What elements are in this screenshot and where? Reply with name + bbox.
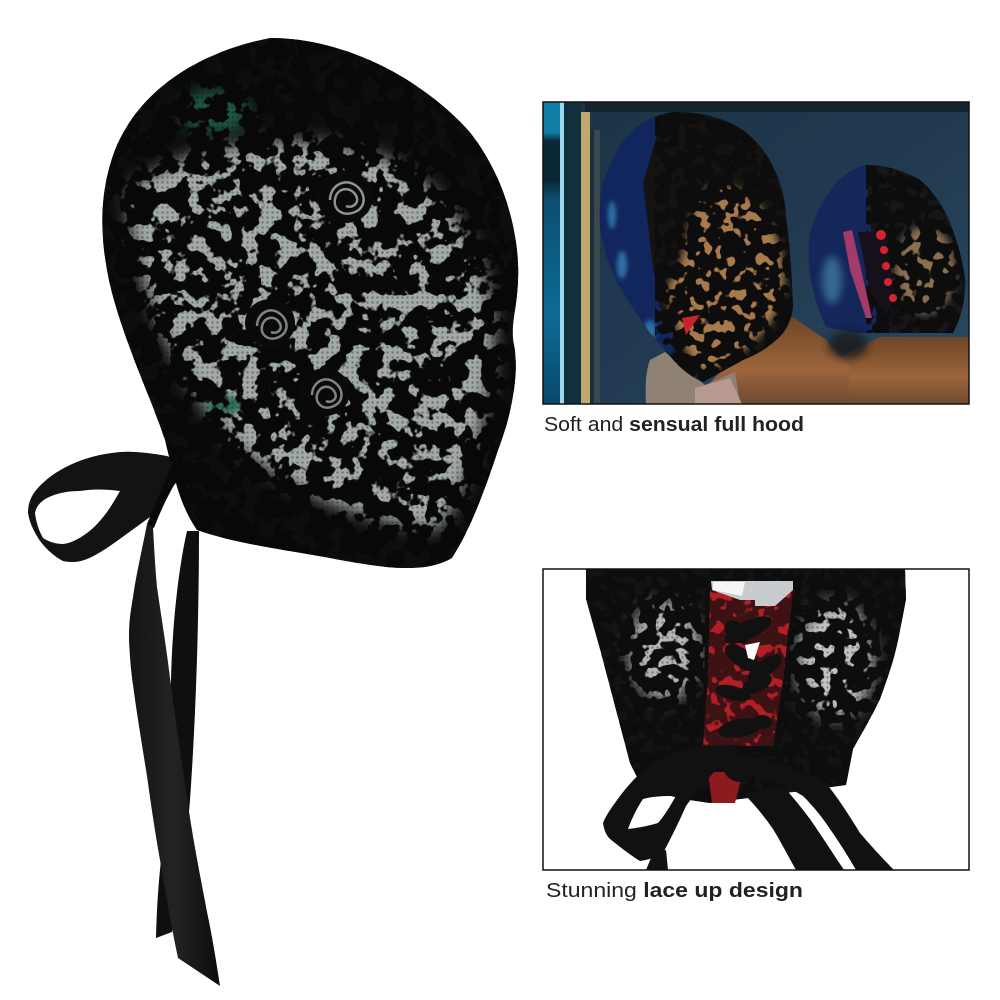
ribbon: back tail bbox=[156, 531, 199, 938]
ribbon: front tail bbox=[129, 524, 220, 986]
red lacing bbox=[843, 230, 872, 318]
red glimpse bbox=[682, 315, 700, 335]
photo panel border bbox=[543, 102, 969, 404]
ribbon ties bbox=[28, 452, 220, 986]
rose one bbox=[317, 171, 373, 223]
rose two bbox=[245, 299, 295, 347]
front hair bbox=[710, 317, 850, 404]
corset opening highlight bbox=[713, 582, 745, 596]
wall top shadow bbox=[585, 102, 969, 112]
hood: lace roses bbox=[245, 171, 373, 416]
mirror frame bbox=[543, 102, 600, 404]
reflected dark neck bbox=[828, 331, 868, 359]
ribbon: loop bbox=[28, 452, 177, 562]
reflected hood bbox=[808, 165, 966, 333]
bow: knot bbox=[724, 772, 743, 782]
caption: full hood: Soft and sensual full hood bbox=[544, 414, 804, 436]
main lace hood bbox=[90, 30, 530, 580]
photo panel: full hood bbox=[543, 102, 970, 404]
red corset panel bbox=[703, 590, 793, 746]
lacing bbox=[716, 616, 782, 738]
lace up panel border bbox=[543, 569, 969, 870]
panel background bbox=[543, 569, 969, 870]
left hair and neck bbox=[646, 352, 740, 404]
hood: net mesh bbox=[90, 30, 530, 580]
caption: lace up: Stunning lace up design bbox=[546, 880, 803, 902]
front hood bbox=[595, 105, 800, 385]
photo wall bbox=[543, 102, 969, 404]
bow: left tail bbox=[646, 850, 668, 870]
hood: sheer lit centre bbox=[128, 141, 494, 530]
hood: green tint near crown bbox=[179, 90, 251, 134]
lacing gap bbox=[745, 642, 760, 660]
rose three bbox=[300, 368, 350, 416]
corset opening bbox=[711, 581, 793, 606]
reflected hair bbox=[835, 337, 969, 404]
hood: green tint lower bbox=[207, 395, 243, 415]
bow: left loop bbox=[603, 745, 740, 861]
photo panel: lace up bbox=[586, 570, 906, 870]
ribbon bow bbox=[603, 745, 894, 870]
red lower patch bbox=[708, 772, 743, 803]
bow: right tail outer bbox=[795, 787, 894, 870]
lace hood back bbox=[580, 565, 915, 805]
hood: dark base bbox=[90, 30, 530, 580]
bow: right tail inner bbox=[748, 792, 844, 870]
ribbon: knot bbox=[147, 458, 176, 528]
hood: lace texture bbox=[90, 30, 530, 580]
corset trim bbox=[704, 614, 793, 694]
